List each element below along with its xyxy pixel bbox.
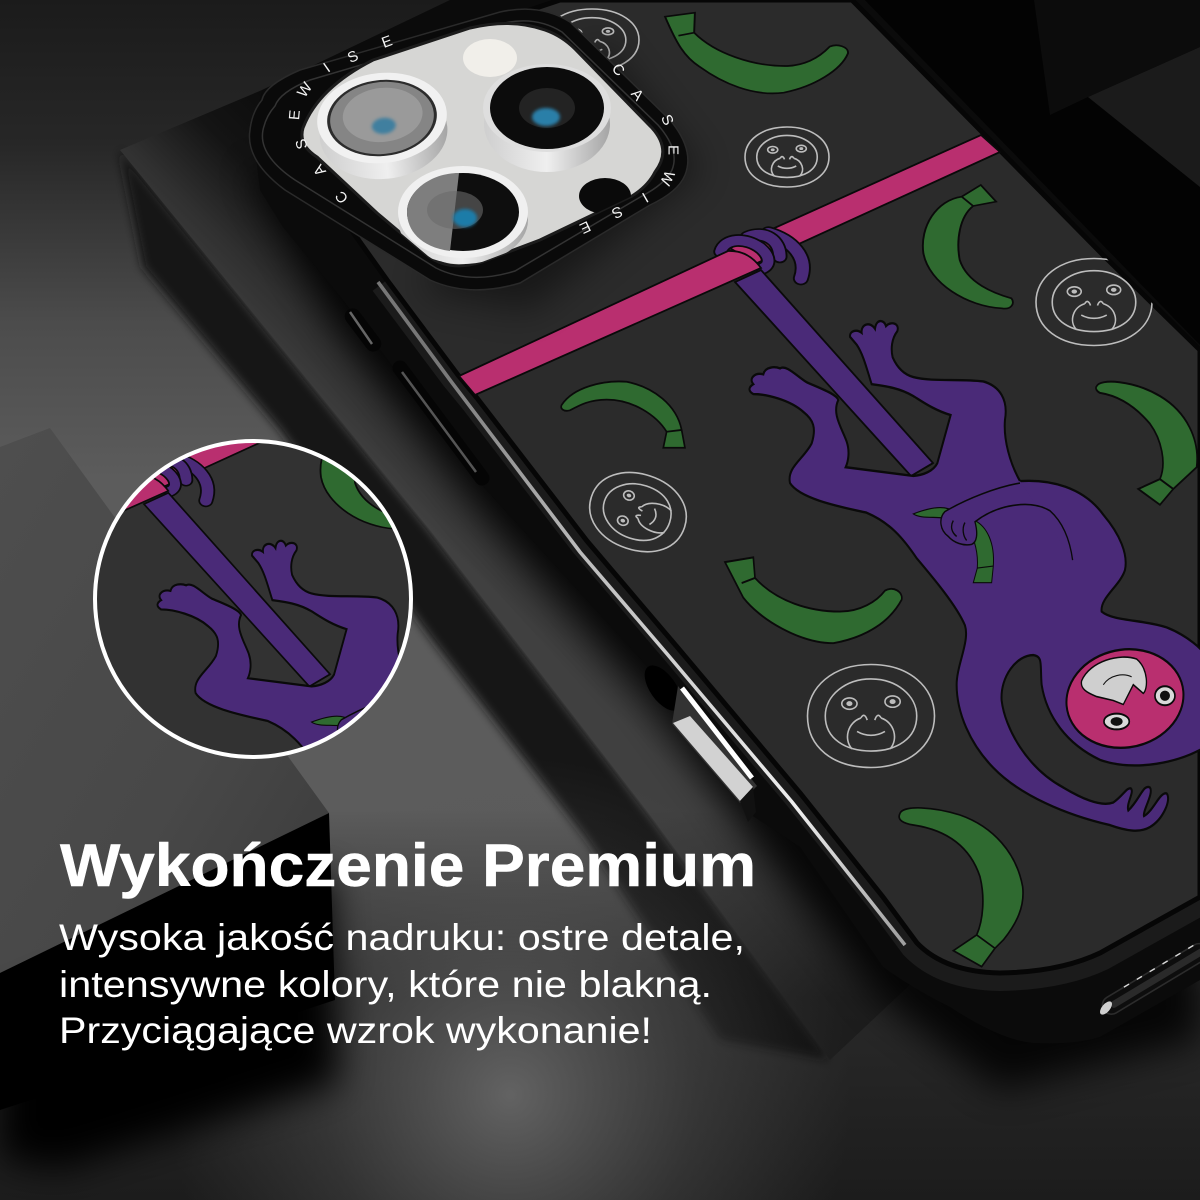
lens top left (317, 72, 448, 179)
brand lettering on ring: S (292, 137, 312, 151)
case rim band (387, 280, 1200, 973)
background: left block side face (0, 813, 338, 1170)
brand lettering on ring: W (656, 168, 678, 189)
brand lettering on ring: C (332, 187, 352, 207)
charging port (1098, 940, 1200, 1018)
brand lettering on ring: E (379, 32, 395, 52)
magnified detail circle (93, 439, 413, 759)
background: block under the phone, side face (120, 150, 830, 1060)
lens bottom (398, 166, 528, 264)
phone print artwork (459, 9, 1200, 967)
camera ring (249, 9, 688, 290)
lens top right (483, 64, 611, 172)
description text (59, 917, 745, 1051)
brand lettering on ring: A (627, 86, 647, 104)
description text: Wysoka jakość nadruku: ostre detale, (59, 917, 745, 958)
phone body (253, 0, 1200, 1043)
description text: intensywne kolory, które nie blakną. (59, 964, 712, 1005)
title: Wykończenie Premium (60, 832, 756, 899)
brand lettering on ring: S (657, 112, 677, 128)
camera bump soft shadow (420, 40, 700, 310)
camera bump (249, 9, 688, 290)
brand lettering on ring: E (286, 109, 304, 121)
mic hole (579, 178, 631, 214)
flash (463, 39, 517, 77)
description text: Przyciągające wzrok wykonanie! (59, 1010, 652, 1051)
glossy highlight along the edge (378, 282, 905, 945)
mute switch (342, 305, 384, 355)
background: phone shadow (250, 170, 1200, 1090)
printed back surface (350, 0, 1200, 973)
artwork: monkey, bar and bananas (459, 13, 1200, 967)
brand lettering on ring: E (664, 145, 682, 155)
brand lettering on ring: S (609, 202, 625, 222)
background: top right blocks (850, 0, 1200, 360)
power button silver (672, 686, 757, 822)
background: floor shading (0, 755, 1200, 1200)
brand lettering on ring: E (577, 217, 593, 237)
volume button (400, 368, 482, 478)
brand lettering on ring: I (639, 189, 651, 205)
brand lettering on ring: C (608, 60, 628, 80)
brand lettering on ring (286, 32, 682, 237)
icon: small faces (545, 9, 1152, 768)
brand lettering on ring: I (320, 60, 334, 76)
background: block under the phone, top face (120, 90, 1000, 1060)
power button dimple (637, 659, 689, 717)
brand lettering on ring: S (345, 47, 361, 67)
brand lettering on ring: A (310, 161, 330, 179)
glass plate (302, 23, 663, 266)
phone case (253, 0, 1200, 1043)
ring inner rim line (262, 21, 674, 277)
background: left block top face (0, 428, 329, 973)
brand lettering on ring: W (294, 79, 317, 101)
